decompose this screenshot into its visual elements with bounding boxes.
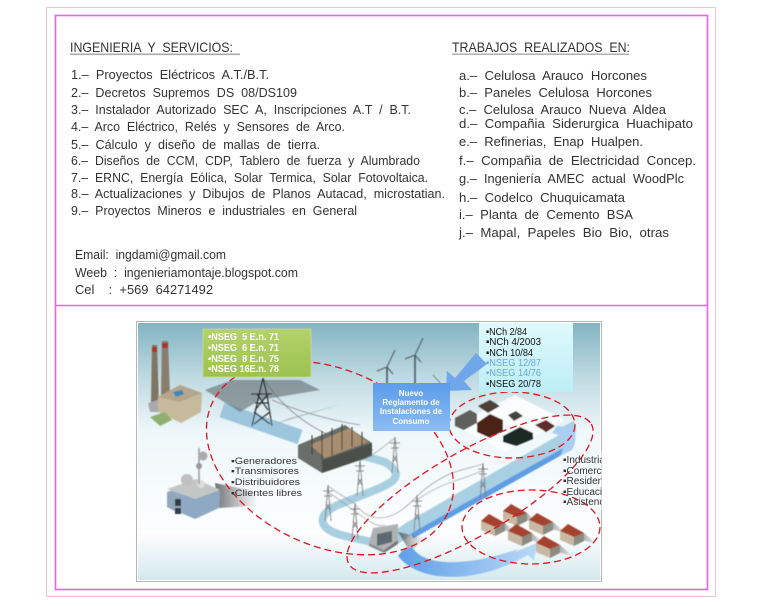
label: consumer sectors [563,455,605,508]
label: consumer sectors: ▪Educaci [563,487,602,498]
services list: 5.– Cálculo y diseño de mallas de tierra. [71,138,320,152]
illustration background [136,322,602,582]
heading: trabajos realizados en: TRABAJOS REALIZADOS EN: [452,39,630,55]
works list [458,69,696,240]
label: market participants [231,456,302,499]
services list: 1.– Proyectos Eléctricos A.T./B.T. [71,68,269,82]
callout: standards list: ▪NCh 4/2003 [486,336,541,348]
callout: green NSEG box: ▪NSEG 8 E.n. 75 [208,353,279,365]
label: market participants: ▪Clientes libres [231,488,302,499]
services list: 6.– Diseños de CCM, CDP, Tablero de fuerza y Alumbrado [71,154,420,168]
works list: a.– Celulosa Arauco Horcones [459,69,647,83]
works list: f.– Compañia de Electricidad Concep. [459,154,696,168]
callout: new regulation box: Instalaciones de [380,407,443,416]
callout: green NSEG box [203,329,311,377]
icon: substation [298,424,372,473]
callout: standards list: ▪NSEG 20/78 [486,378,541,390]
label: consumer sectors: ▪Comerc [563,466,602,477]
services list: 9.– Proyectos Mineros e industriales en General [71,204,357,218]
works list: c.– Celulosa Arauco Nueva Aldea [459,103,666,117]
callout: new regulation box: Reglamento de [382,398,440,407]
works list: j.– Mapal, Papeles Bio Bio, otras [458,226,669,240]
works list: h.– Codelco Chuquicamata [459,191,625,205]
works list: g.– Ingeniería AMEC actual WoodPlc [459,172,684,186]
icon: houses [481,504,598,558]
label: consumer sectors: ▪Industria [563,455,605,466]
services list: 2.– Decretos Supremos DS 08/DS109 [71,86,297,100]
callout: standards list: ▪NSEG 12/87 [486,357,541,369]
icon: high voltage tower [251,378,373,450]
arrow: standards to regulation [446,353,487,391]
blue arrow: to industry [552,426,575,456]
callout: standards list: ▪NCh 10/84 [486,347,533,359]
illustration: electrical system [136,322,646,600]
icon: wind turbines [377,338,441,384]
callout: standards list [479,323,573,392]
services list: 7.– ERNC, Energía Eólica, Solar Termica, Solar Fotovoltaica. [71,171,428,185]
works list: e.– Refinerias, Enap Hualpen. [459,135,643,149]
services list: 4.– Arco Eléctrico, Relés y Sensores de Arco. [71,120,345,134]
services list [71,68,445,218]
callout: new regulation box: Consumo [393,417,430,426]
label: consumer sectors: ▪Residen [563,476,603,487]
callout: green NSEG box: ▪NSEG 16E.n. 78 [208,363,279,375]
contact details: Cel : +569 64271492 [75,283,213,297]
callout: standards list: ▪NCh 2/84 [486,326,527,338]
transmission roadway band [222,410,570,545]
services list: 8.– Actualizaciones y Dibujos de Planos Autacad, microstatian. [71,187,445,201]
pylons along lower line [323,437,488,539]
callout: standards list: ▪NSEG 14/76 [486,367,541,379]
label: market participants: ▪Distribuidores [231,477,300,488]
services list: 3.– Instalador Autorizado SEC A, Inscripciones A.T / B.T. [71,103,411,117]
red dashed coverage ellipses [175,323,612,600]
works list: d.– Compañia Siderurgica Huachipato [459,117,693,131]
icon: power plant [148,341,320,426]
contact details: Weeb : ingenieriamontaje.blogspot.com [75,266,298,280]
label: market participants: ▪Transmisores [231,466,299,477]
callout: new regulation box: Nuevo [399,389,423,398]
callout: green NSEG box: ▪NSEG 5 E.n. 71 [208,331,279,343]
icon: industrial cluster [455,395,565,452]
callout: new regulation box [373,383,450,431]
callout: green NSEG box: ▪NSEG 6 E.n. 71 [208,342,279,354]
heading: ingenieria y servicios: INGENIERIA Y SERVICIOS: [70,39,233,55]
works list: b.– Paneles Celulosa Horcones [459,86,652,100]
works list: i.– Planta de Cemento BSA [459,208,634,222]
label: market participants: ▪Generadores [231,456,297,467]
contact details: Email: ingdami@gmail.com [75,248,226,262]
icon: distribution transformer [369,524,425,553]
panel: services [70,39,445,297]
contact details [75,248,298,297]
label: consumer sectors: ▪Asistenc [563,497,604,508]
panel: completed works [452,39,696,240]
icon: communications building [167,448,258,519]
blue arrow: to houses [398,543,537,577]
